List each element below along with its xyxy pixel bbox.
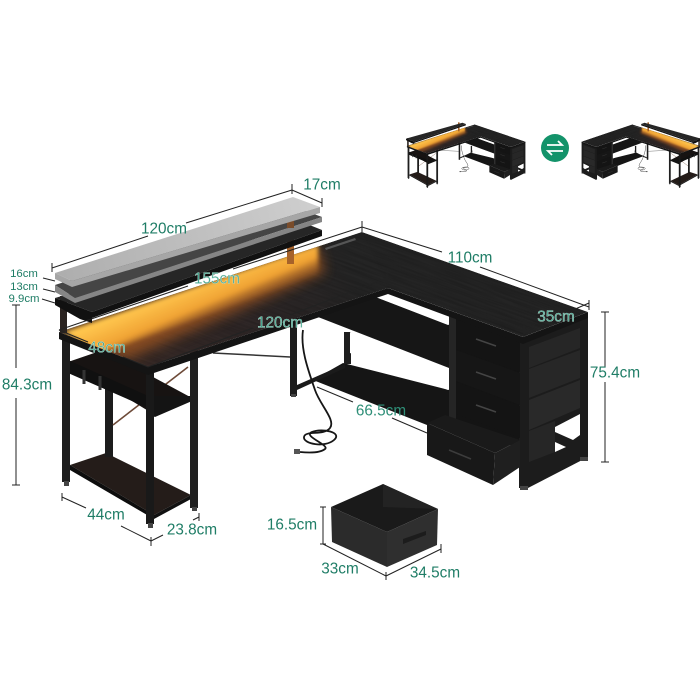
- ghost shelf: middle position: [55, 207, 322, 303]
- open bay in side: [555, 414, 580, 440]
- left section lower shelf: [70, 453, 191, 515]
- open drawer: [427, 415, 520, 485]
- desktop surface: [59, 124, 700, 366]
- drawer left face: [331, 507, 387, 567]
- measurement labels: 120cm: [141, 220, 187, 238]
- cabinet feet: [520, 486, 528, 490]
- thumbnail: right-hand orientation: [543, 74, 700, 193]
- measurement labels: 155cm: [194, 270, 240, 288]
- measurement labels: [2, 176, 640, 582]
- measurement labels: 66.5cm: [356, 402, 406, 420]
- measurement labels: 44cm: [87, 506, 125, 524]
- side panels: [529, 328, 580, 368]
- measurement labels: 110cm: [448, 250, 492, 266]
- rear leg: [344, 332, 351, 364]
- cabinet frame: [449, 314, 588, 490]
- rear rail: [213, 353, 290, 357]
- main desk illustration: [55, 122, 700, 528]
- dimension lines: [12, 184, 609, 580]
- measurement labels: 33cm: [321, 560, 359, 578]
- legs of left section: [62, 336, 70, 482]
- long upper shelf: [318, 296, 449, 368]
- measurement labels: 84.3cm: [2, 376, 52, 394]
- thumbnail: left-hand orientation: [373, 74, 564, 193]
- power cable: [294, 330, 336, 454]
- measurement labels: 35cm: [537, 308, 575, 326]
- measurement labels: 48cm: [88, 340, 126, 356]
- measurement labels: 23.8cm: [167, 522, 217, 538]
- riser post seen through shelves: [287, 220, 294, 228]
- desk riser shelf: [55, 222, 322, 333]
- measurement labels: 75.4cm: [590, 364, 640, 382]
- drawer right face: [387, 509, 438, 567]
- back centre leg: [105, 380, 113, 457]
- measurement labels: 34.5cm: [410, 564, 460, 582]
- long lower shelf and rails: [313, 363, 449, 425]
- white gaps between shelves: [350, 332, 448, 390]
- measurement labels: 9.9cm: [8, 293, 40, 305]
- measurement labels: 17cm: [303, 176, 341, 194]
- centre leg: [290, 316, 297, 396]
- drawer handle: [403, 531, 426, 544]
- cabinet drawers: [456, 319, 520, 438]
- drawer interior: [331, 484, 438, 532]
- measurement labels: 13cm: [10, 281, 38, 293]
- swap icon: [541, 134, 569, 162]
- measurement labels: 120cm: [257, 314, 303, 332]
- hanging hooks: [84, 370, 100, 390]
- measurement labels: 16cm: [10, 268, 38, 280]
- removed drawer: [331, 484, 438, 567]
- measurement labels: 16.5cm: [267, 516, 317, 534]
- desktop edge: [59, 288, 588, 375]
- brown cross brace: [113, 367, 188, 425]
- left section upper shelf with bag: [68, 350, 192, 415]
- ghost shelf: top position: [55, 197, 320, 287]
